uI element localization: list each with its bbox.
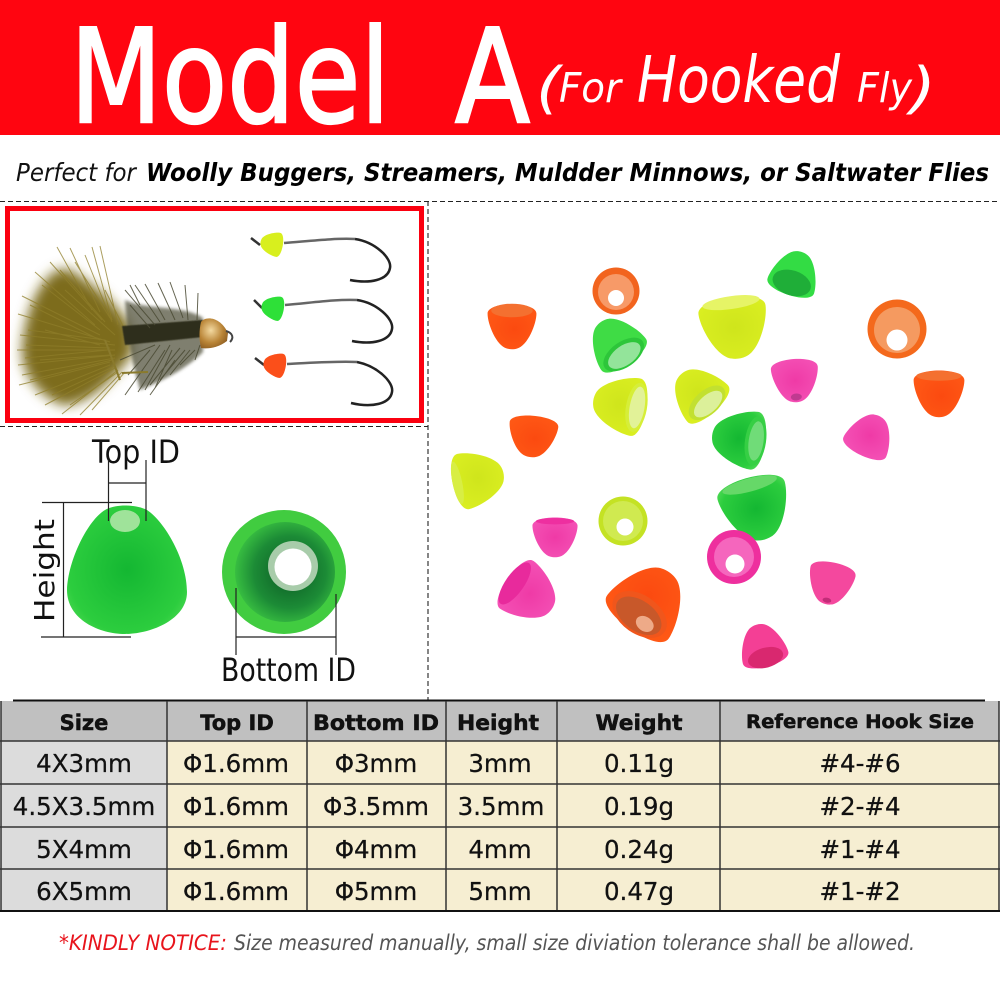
row 4.5X3.5mm: 3.5mm (458, 792, 544, 821)
pink cone right (840, 406, 901, 465)
row 4X3mm: 3mm (468, 749, 532, 778)
table header row: Weight (596, 711, 682, 735)
footer notice: *KINDLY NOTICE: (59, 931, 227, 955)
green large cone (714, 469, 798, 549)
row 4X3mm (36, 749, 901, 778)
yellow cone, mouth lower right (661, 356, 735, 430)
panel: fly and hooks photo (8, 208, 422, 420)
pink cone with hole, lower (804, 558, 857, 609)
icon: orange cone on hook (255, 351, 392, 405)
orange ring (592, 268, 640, 314)
row 6X5mm (36, 877, 901, 906)
title banner: Model (70, 1, 390, 153)
label: Height: Height (28, 519, 61, 622)
title banner (0, 0, 1000, 153)
icon: green cone side view (67, 506, 187, 634)
orange big cone (598, 551, 700, 652)
row 6X5mm: 6X5mm (36, 877, 132, 906)
row 4.5X3.5mm (13, 792, 901, 821)
panel: dimension diagram (28, 433, 356, 689)
green top cone (765, 244, 825, 302)
footer notice: Size measured manually, small size diviation tolerance shall be allowed. (234, 931, 915, 955)
row 4.5X3.5mm: 4.5X3.5mm (13, 792, 155, 821)
yellow cone left (447, 445, 509, 511)
row 5X4mm: 0.24g (604, 835, 674, 864)
row 4.5X3.5mm: Φ3.5mm (323, 792, 429, 821)
subtitle: Perfect for (16, 158, 138, 187)
row 5X4mm: Φ4mm (335, 835, 417, 864)
row 6X5mm: Φ1.6mm (183, 877, 289, 906)
row 4X3mm: #4-#6 (819, 749, 901, 778)
row 5X4mm: Φ1.6mm (183, 835, 289, 864)
pink cone with hole (770, 357, 820, 404)
row 4.5X3.5mm: Φ1.6mm (183, 792, 289, 821)
pink cone, mouth upper left (490, 554, 568, 633)
row 5X4mm (36, 835, 901, 864)
icon: yellow cone on hook (251, 230, 390, 282)
specification table (0, 700, 1000, 911)
panel: scattered colored cones (447, 244, 964, 673)
icon: green cone on hook (254, 294, 392, 342)
table header row: Size (60, 711, 108, 735)
row 5X4mm: 5X4mm (36, 835, 132, 864)
row 6X5mm: 0.47g (604, 877, 674, 906)
label: Top ID: Top ID (91, 433, 180, 471)
title banner: Fly (857, 64, 913, 112)
title banner: Hooked (637, 44, 840, 118)
yellow ring (598, 496, 648, 546)
title banner: ( (536, 56, 563, 121)
row 4X3mm: Φ1.6mm (183, 749, 289, 778)
icon: woolly bugger fly (17, 246, 232, 415)
row 5X4mm: #1-#4 (819, 835, 901, 864)
yellow big cone (697, 291, 772, 363)
label: Bottom ID: Bottom ID (221, 651, 356, 689)
pink ring (707, 530, 761, 584)
green cone, mouth lower right (579, 306, 653, 381)
row 4X3mm: 0.11g (604, 749, 674, 778)
title banner: For (559, 64, 623, 112)
row 4X3mm: 4X3mm (36, 749, 132, 778)
table header row: Height (457, 711, 539, 735)
row 4.5X3.5mm: #2-#4 (819, 792, 901, 821)
table header row: Bottom ID (313, 711, 439, 735)
title banner: A (455, 1, 530, 153)
orange ring large (868, 300, 926, 358)
yellow cone, mouth right (588, 371, 652, 438)
table header row: Top ID (200, 711, 274, 735)
green cone, mouth right (708, 406, 770, 471)
table header row (60, 711, 974, 735)
row 6X5mm: Φ5mm (335, 877, 417, 906)
icon: green cone bottom view (222, 510, 346, 634)
row 4.5X3.5mm: 0.19g (604, 792, 674, 821)
row 6X5mm: 5mm (468, 877, 532, 906)
table header row: Reference Hook Size (746, 712, 974, 733)
orange cone, mouth up (488, 304, 536, 349)
orange cone right (914, 370, 964, 417)
title banner: ) (905, 56, 936, 121)
row 4X3mm: Φ3mm (335, 749, 417, 778)
row 6X5mm: #1-#2 (819, 877, 901, 906)
pink cone, bottom (734, 618, 791, 673)
pink cone, mouth up (532, 518, 578, 557)
row 5X4mm: 4mm (468, 835, 532, 864)
orange cone left (506, 413, 559, 460)
